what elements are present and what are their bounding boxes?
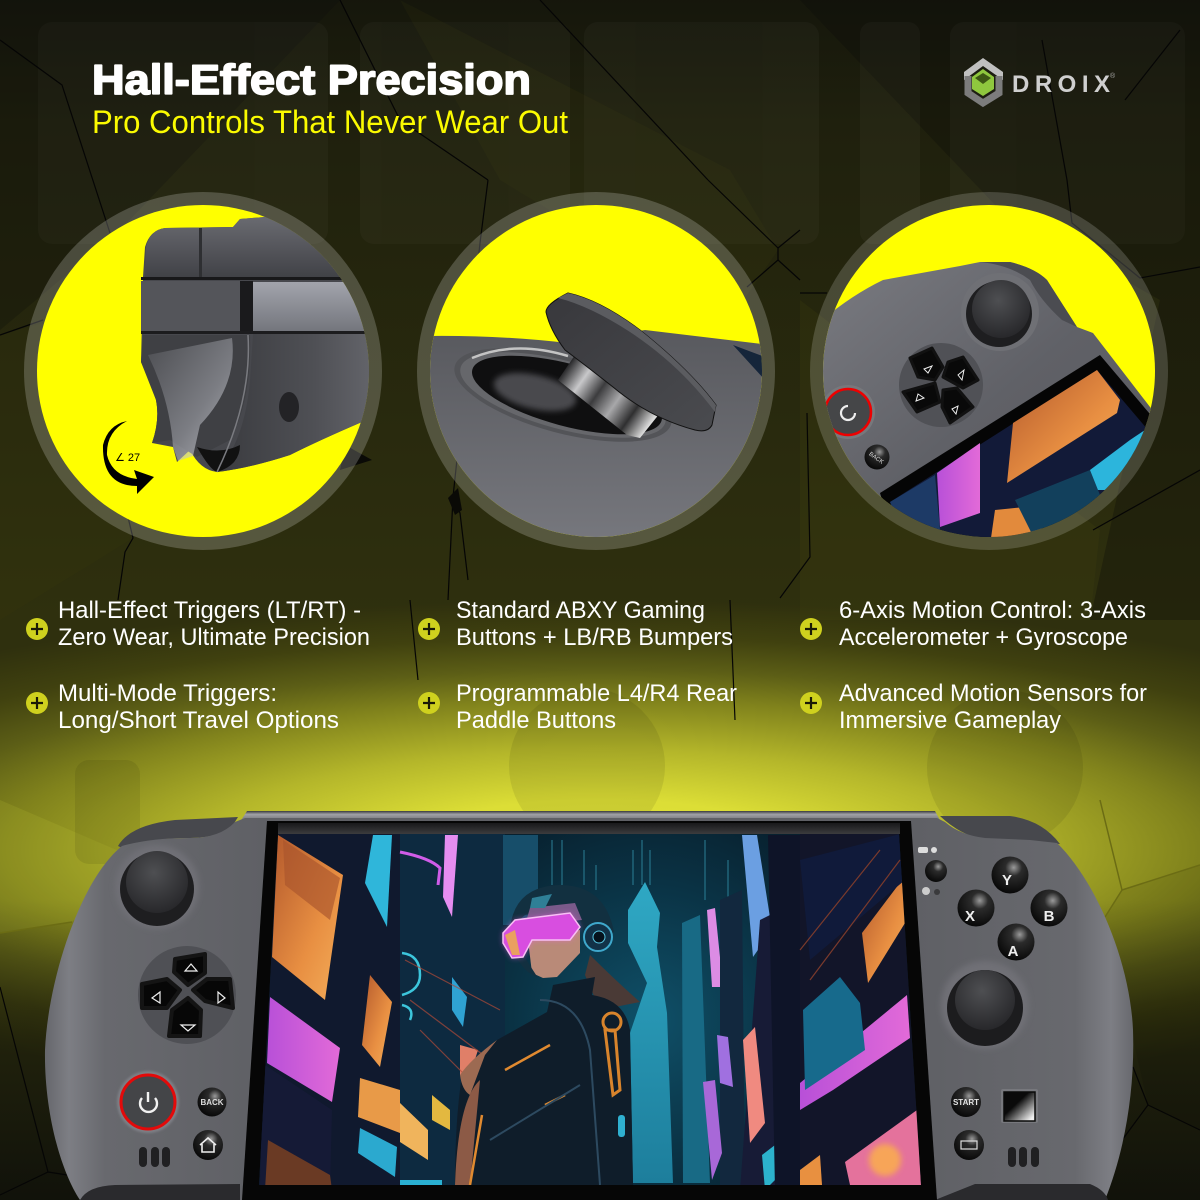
panel: joystick close-up circle <box>417 192 775 550</box>
power button <box>117 1071 179 1133</box>
home button <box>193 1130 223 1160</box>
bullet: 6-axis motion: Accelerometer + Gyroscope <box>839 624 1128 651</box>
console body <box>45 818 1133 1200</box>
panel: trigger close-up circle <box>24 192 383 550</box>
left speaker <box>139 1147 170 1167</box>
bullet: ABXY buttons <box>456 597 733 651</box>
ABXY buttons <box>958 856 1068 960</box>
ABXY buttons: B <box>1044 908 1055 925</box>
ABXY buttons: X <box>965 908 975 925</box>
logo: DROIX: DROIX <box>1012 71 1110 98</box>
head <box>528 930 580 978</box>
start button <box>951 1087 981 1117</box>
console body <box>820 262 1160 545</box>
select button <box>954 1130 984 1160</box>
back button: BACK <box>200 1098 224 1107</box>
trigger body <box>141 215 383 472</box>
screen bezel <box>880 355 1150 537</box>
back button <box>198 1088 226 1116</box>
central towers <box>552 840 728 1183</box>
top edge strip <box>240 811 941 822</box>
feature list <box>26 597 1147 734</box>
logo: DROIX <box>964 58 1116 103</box>
ABXY buttons: Y <box>1002 872 1012 889</box>
joystick socket <box>454 347 672 442</box>
joystick <box>966 280 1039 351</box>
goggles <box>503 913 580 958</box>
logo: DROIX: ® <box>1110 72 1116 80</box>
bullet: Multi-Mode Triggers <box>58 680 339 734</box>
right city blocks <box>703 834 925 1190</box>
panel: d-pad and screen close-up circle <box>810 192 1168 560</box>
bullet: motion sensors: Immersive Gameplay <box>839 707 1061 734</box>
screen bezel <box>242 821 937 1200</box>
bullet: ABXY buttons: Buttons + LB/RB Bumpers <box>456 624 733 651</box>
suit <box>455 977 633 1185</box>
bullet: paddle buttons <box>456 680 737 734</box>
ABXY buttons: A <box>1008 943 1019 960</box>
subtitle: Pro Controls That Never Wear Out <box>92 104 568 140</box>
bullet: ABXY buttons: Standard ABXY Gaming <box>456 597 705 624</box>
bullet: motion sensors: Advanced Motion Sensors for <box>839 680 1147 707</box>
d-pad <box>899 343 983 427</box>
screen art <box>890 370 1146 537</box>
bullet: paddle buttons: Programmable L4/R4 Rear <box>456 680 737 707</box>
back button <box>864 444 890 470</box>
handheld console <box>45 811 1133 1200</box>
game screen artwork <box>255 830 925 1190</box>
icon: 27 degree arrow <box>103 421 154 494</box>
right stick <box>941 961 1029 1049</box>
bullet: Hall-Effect Triggers: Zero Wear, Ultimate Precision <box>58 624 370 651</box>
console surface <box>425 330 770 545</box>
bullet: Multi-Mode Triggers: Long/Short Travel Options <box>58 707 339 734</box>
square fingerprint button <box>1001 1089 1038 1123</box>
left stick <box>115 845 199 929</box>
grip bottoms <box>80 1184 1108 1200</box>
title <box>92 56 568 140</box>
bullet: motion sensors <box>839 680 1147 734</box>
bullet icons <box>26 618 822 714</box>
bullet: 6-axis motion <box>839 597 1146 651</box>
back button: BACK <box>867 451 884 466</box>
right speaker <box>1008 1147 1039 1167</box>
power button <box>821 385 875 439</box>
joystick shaft and cap <box>546 293 716 438</box>
shoulder bumpers <box>118 816 1060 848</box>
bullet: Multi-Mode Triggers: Multi-Mode Triggers: <box>58 680 277 707</box>
left d-pad <box>138 946 236 1044</box>
start button: START <box>953 1098 979 1107</box>
title: Hall-Effect Precision <box>92 56 531 103</box>
bullet: Hall-Effect Triggers: Hall-Effect Triggers (LT/RT) - <box>58 597 361 624</box>
character <box>455 885 640 1185</box>
bullet: paddle buttons: Paddle Buttons <box>456 707 616 734</box>
bullet: Hall-Effect Triggers <box>58 597 370 651</box>
icon: 27 degree arrow: ∠ 27 <box>115 452 140 464</box>
menu button and indicators <box>918 847 947 895</box>
bullet: 6-axis motion: 6-Axis Motion Control: 3-Axis <box>839 597 1146 624</box>
left city blocks <box>255 830 538 1190</box>
